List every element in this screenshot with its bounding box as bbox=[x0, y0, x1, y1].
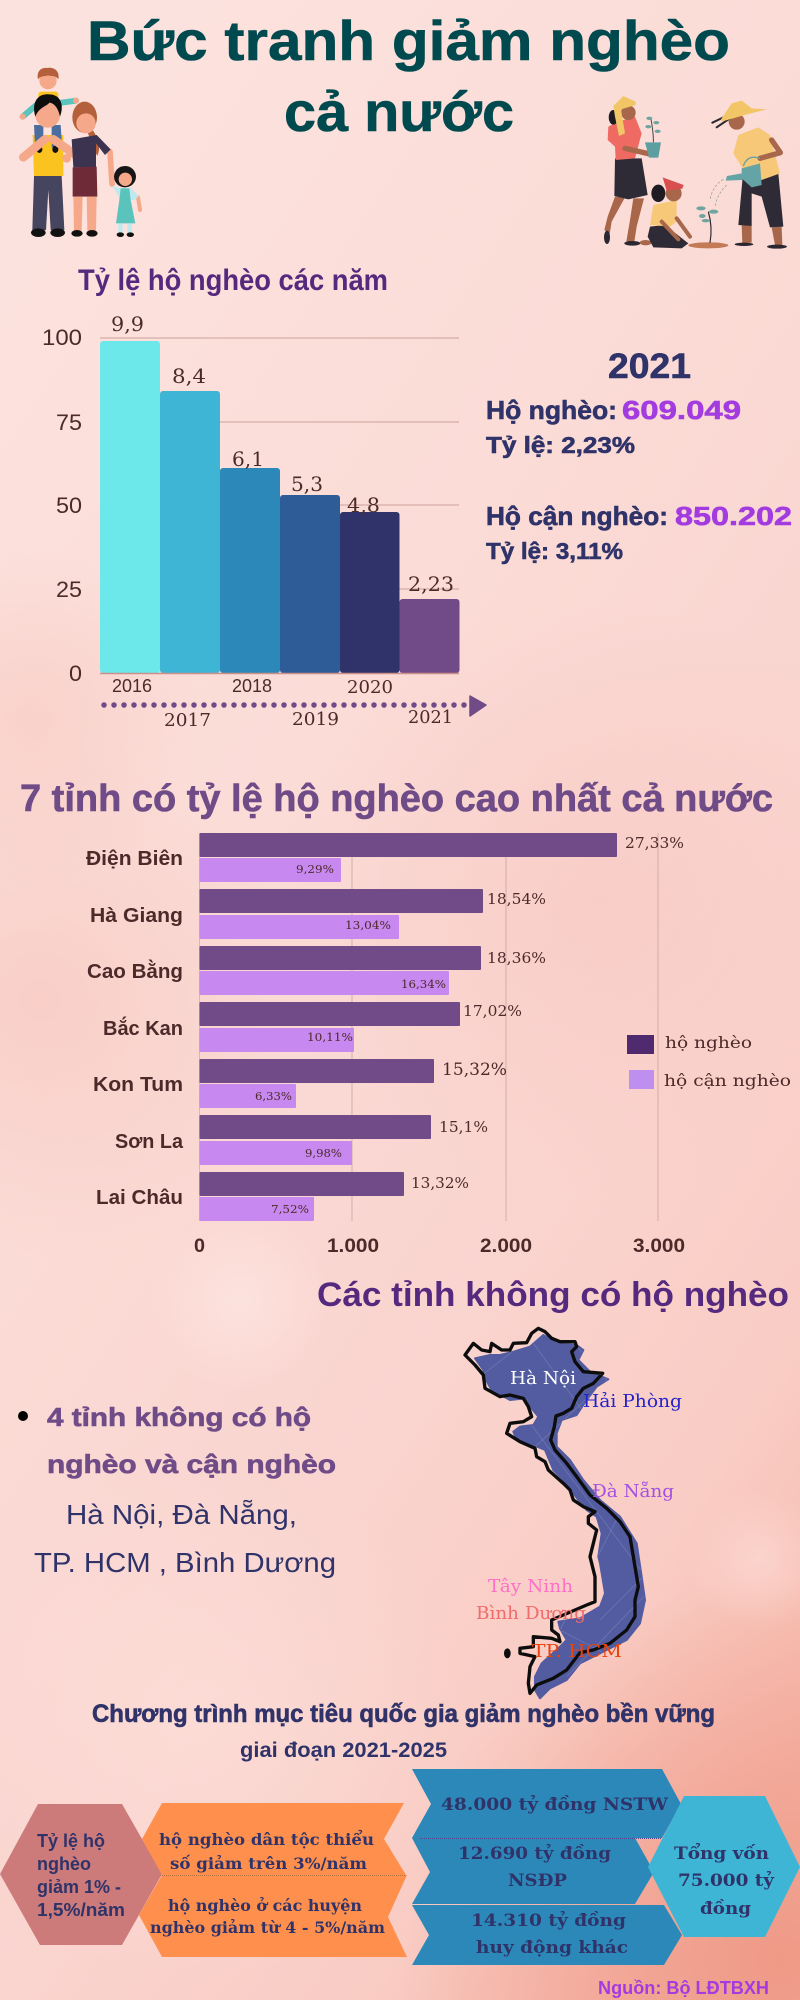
bar chart: provinces bbox=[86, 833, 791, 1257]
y axis labels: 50 bbox=[56, 493, 82, 518]
text block: 4 provinces: nghèo và cận nghèo bbox=[47, 1449, 336, 1479]
map labels: Tây Ninh bbox=[488, 1576, 573, 1597]
panel: other mobilised funds bbox=[412, 1905, 682, 1965]
hexagon: poverty reduction target: giảm 1% - bbox=[37, 1877, 121, 1897]
map labels: Hà Nội bbox=[510, 1368, 576, 1389]
panel: ethnic minority target bbox=[142, 1803, 406, 1875]
map of Vietnam bbox=[465, 1320, 682, 1698]
text block: 4 provinces bbox=[18, 1402, 336, 1578]
province labels: Hà Giang bbox=[90, 905, 183, 927]
hexagon: total capital bbox=[648, 1796, 800, 1937]
panel: poor districts target bbox=[139, 1875, 407, 1957]
man with watering can bbox=[712, 101, 787, 249]
heading: national target programme: Chương trình mục tiêu quốc gia giảm nghèo bền vững bbox=[92, 1700, 715, 1728]
x axis labels: 1.000 bbox=[327, 1236, 379, 1257]
title: Bức tranh giảm nghèo bbox=[87, 9, 730, 72]
value labels: poor: 18,36% bbox=[487, 949, 546, 967]
panel: other mobilised funds: 14.310 tỷ đồng bbox=[471, 1911, 626, 1931]
year labels: 2018 bbox=[232, 676, 272, 696]
province labels: Sơn La bbox=[115, 1131, 184, 1153]
standing woman bbox=[604, 96, 661, 246]
map labels: Hải Phòng bbox=[583, 1391, 682, 1412]
province labels: Lai Châu bbox=[96, 1187, 183, 1209]
map labels bbox=[476, 1368, 682, 1662]
daughter bbox=[112, 166, 140, 237]
year labels: 2016 bbox=[112, 676, 152, 696]
value labels: near-poor: 6,33% bbox=[255, 1089, 292, 1103]
y axis labels: 25 bbox=[56, 577, 82, 602]
legend: hộ cận nghèo bbox=[664, 1071, 791, 1090]
illustration: family bbox=[20, 68, 140, 237]
heading: top 7 provinces: 7 tỉnh có tỷ lệ hộ nghèo cao nhất cả nước bbox=[20, 778, 773, 820]
hexagon: poverty reduction target: nghèo bbox=[37, 1854, 91, 1874]
arrow: timeline bbox=[104, 696, 486, 716]
value labels: near-poor: 7,52% bbox=[271, 1202, 309, 1216]
heading: poverty rate by year: Tỷ lệ hộ nghèo các năm bbox=[78, 264, 388, 297]
panel: local budget bbox=[412, 1838, 662, 1904]
value labels: poor: 15,32% bbox=[442, 1060, 507, 1080]
legend bbox=[627, 1033, 791, 1090]
y axis labels bbox=[42, 325, 82, 686]
title bbox=[87, 9, 730, 143]
panel: 2021 stats: Tỷ lệ: 2,23% bbox=[486, 432, 635, 458]
child on shoulders bbox=[20, 68, 79, 120]
panel: central budget bbox=[412, 1769, 681, 1838]
illustration: farmers bbox=[604, 96, 787, 249]
hexagon: total capital: Tổng vốn bbox=[674, 1842, 769, 1864]
text block: 4 provinces: Hà Nội, Đà Nẵng, bbox=[66, 1499, 297, 1530]
hexagon: poverty reduction target: Tỷ lệ hộ bbox=[37, 1831, 105, 1851]
value labels: poor bbox=[411, 834, 684, 1192]
mother bbox=[62, 102, 112, 237]
title: cả nước bbox=[284, 80, 514, 143]
province labels: Cao Bằng bbox=[87, 959, 183, 983]
bars bbox=[100, 341, 460, 673]
bar value labels: 9,9 bbox=[111, 312, 144, 336]
value labels: poor: 17,02% bbox=[463, 1002, 522, 1020]
panel: poor districts target: nghèo giảm từ 4 - 5%/năm bbox=[150, 1918, 386, 1937]
value labels: near-poor: 13,04% bbox=[345, 918, 391, 932]
map labels: TP. HCM bbox=[532, 1641, 622, 1662]
year labels: 2019 bbox=[292, 709, 339, 730]
panel: ethnic minority target: số giảm trên 3%/năm bbox=[170, 1854, 368, 1873]
bar value labels: 2,23 bbox=[408, 572, 454, 596]
value labels: near-poor: 9,29% bbox=[296, 862, 334, 876]
bar value labels bbox=[111, 312, 454, 596]
value labels: poor: 27,33% bbox=[625, 834, 684, 852]
year labels: 2017 bbox=[164, 710, 211, 731]
map labels: Bình Dương bbox=[476, 1603, 586, 1624]
year labels: 2021 bbox=[408, 707, 453, 728]
hexagon: total capital: đồng bbox=[700, 1899, 751, 1919]
heading: national target programme bbox=[92, 1700, 715, 1762]
text block: 4 provinces: 4 tỉnh không có hộ bbox=[47, 1402, 311, 1432]
panel: 2021 stats: Tỷ lệ: 3,11% bbox=[486, 538, 623, 564]
y axis labels: 75 bbox=[56, 410, 82, 435]
sapling bbox=[688, 179, 728, 248]
x axis labels: 2.000 bbox=[480, 1236, 532, 1257]
hexagon: poverty reduction target: 1,5%/năm bbox=[37, 1900, 125, 1920]
value labels: poor: 13,32% bbox=[411, 1174, 469, 1192]
panel: other mobilised funds: huy động khác bbox=[476, 1938, 628, 1958]
y axis labels: 0 bbox=[69, 661, 82, 686]
map labels: Đà Nẵng bbox=[592, 1480, 674, 1502]
source: Nguồn: Bộ LĐTBXH bbox=[598, 1978, 769, 1998]
bar value labels: 6,1 bbox=[232, 447, 264, 471]
panel: ethnic minority target: hộ nghèo dân tộc thiểu bbox=[159, 1830, 374, 1849]
panel: 2021 stats: 609.049 bbox=[622, 395, 741, 425]
x axis labels: 0 bbox=[194, 1236, 205, 1257]
panel: 2021 stats: Hộ cận nghèo: bbox=[486, 501, 668, 531]
province labels: Điện Biên bbox=[86, 848, 183, 870]
kneeling woman bbox=[640, 177, 690, 248]
value labels: near-poor: 9,98% bbox=[305, 1146, 342, 1160]
panel: local budget: 12.690 tỷ đồng bbox=[458, 1844, 611, 1864]
father bbox=[23, 94, 76, 237]
province labels: Bắc Kan bbox=[103, 1016, 183, 1040]
x axis labels: 3.000 bbox=[633, 1236, 685, 1257]
panel: 2021 stats: 850.202 bbox=[675, 501, 792, 531]
value labels: near-poor: 16,34% bbox=[401, 977, 446, 991]
panel: central budget: 48.000 tỷ đồng NSTW bbox=[441, 1795, 669, 1815]
year labels bbox=[112, 676, 453, 731]
panel: 2021 stats: Hộ nghèo: bbox=[486, 395, 617, 425]
column chart: poverty rate 2016-2021 bbox=[42, 312, 486, 731]
panel: 2021 stats bbox=[486, 347, 792, 564]
province labels bbox=[86, 848, 184, 1209]
value labels: near-poor: 10,11% bbox=[307, 1030, 353, 1044]
text block: 4 provinces: TP. HCM , Bình Dương bbox=[34, 1547, 336, 1578]
bar value labels: 4,8 bbox=[347, 493, 380, 517]
value labels: poor: 15,1% bbox=[439, 1118, 488, 1136]
near-poor household bars bbox=[200, 858, 449, 1221]
year labels: 2020 bbox=[347, 677, 393, 698]
heading: national target programme: giai đoạn 2021-2025 bbox=[240, 1739, 447, 1762]
panel: poor districts target: hộ nghèo ở các huyện bbox=[168, 1896, 362, 1915]
y axis labels: 100 bbox=[42, 325, 82, 350]
bar value labels: 8,4 bbox=[172, 364, 206, 388]
panel: local budget: NSĐP bbox=[508, 1871, 567, 1891]
hexagon: total capital: 75.000 tỷ bbox=[678, 1871, 775, 1891]
heading: provinces without poor households: Các tỉnh không có hộ nghèo bbox=[317, 1276, 789, 1314]
value labels: near-poor bbox=[255, 862, 446, 1216]
x axis labels bbox=[194, 1236, 685, 1257]
legend: hộ nghèo bbox=[665, 1033, 752, 1052]
panel: 2021 stats: 2021 bbox=[608, 347, 691, 386]
value labels: poor: 18,54% bbox=[487, 890, 546, 908]
poor household bars bbox=[200, 833, 617, 1196]
province labels: Kon Tum bbox=[93, 1074, 183, 1096]
hexagon: poverty reduction target bbox=[0, 1804, 162, 1945]
bar value labels: 5,3 bbox=[291, 472, 323, 496]
